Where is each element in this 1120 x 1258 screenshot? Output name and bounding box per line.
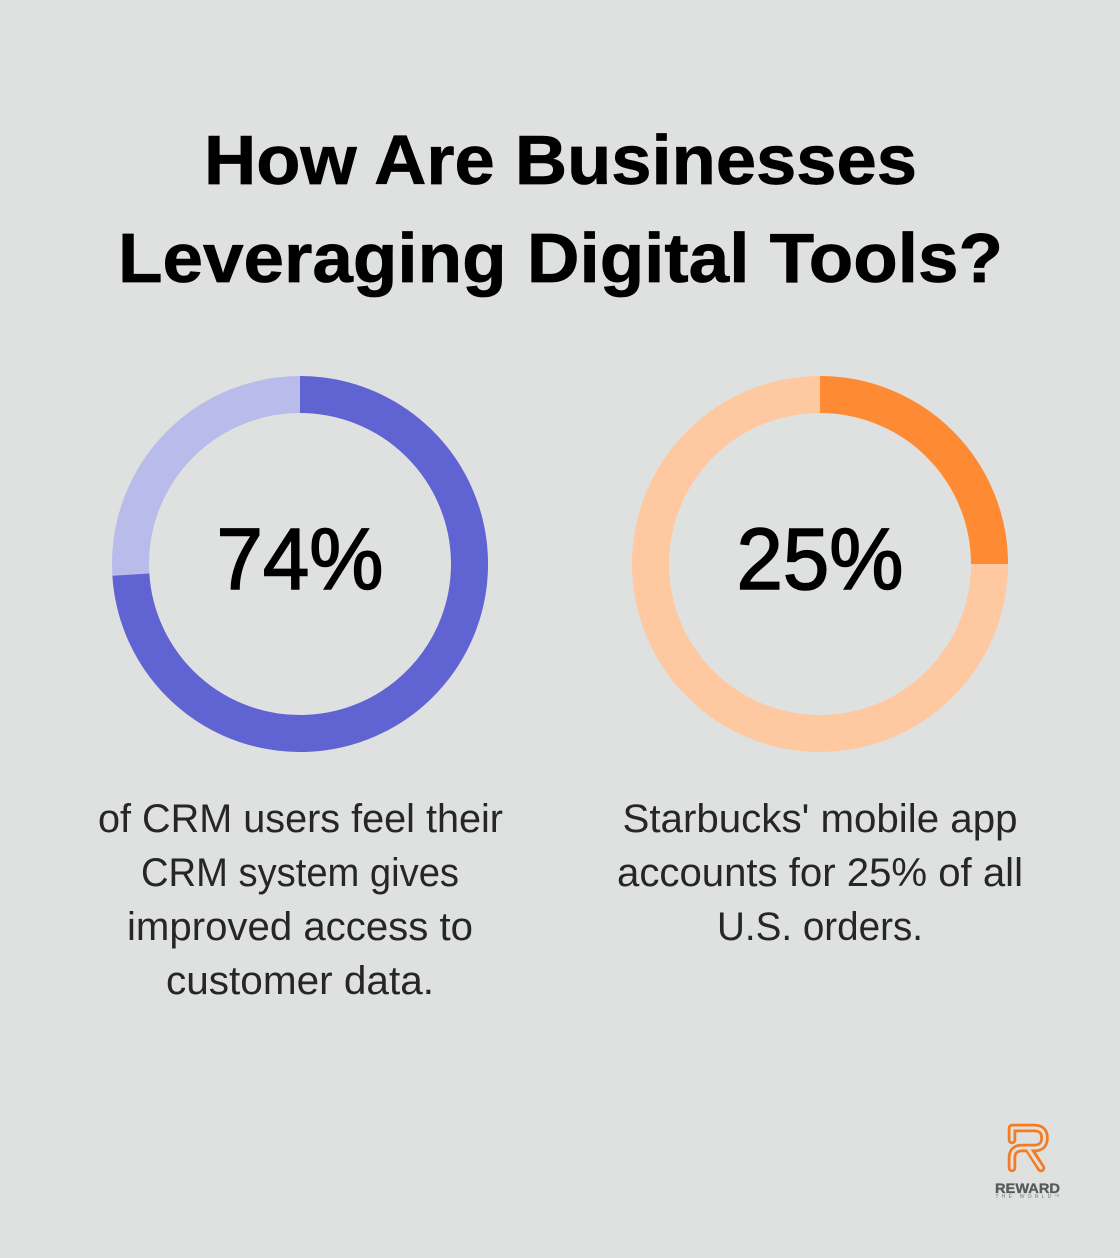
description: Starbucks app: Starbucks' mobile app <box>622 797 1018 841</box>
description: CRM users: of CRM users feel their <box>98 797 503 841</box>
title: How Are Businesses <box>204 121 917 199</box>
description: CRM users: improved access to <box>127 905 473 949</box>
icon: R mark <box>1012 1128 1044 1168</box>
stat value: 74%: 74% <box>216 511 384 608</box>
title <box>118 121 1003 297</box>
stat value: 25%: 25% <box>736 511 904 608</box>
logo: Reward the World <box>995 1128 1060 1200</box>
tagline: THE WORLD™ <box>996 1194 1060 1200</box>
title: Leveraging Digital Tools? <box>118 219 1003 297</box>
description: Starbucks app: accounts for 25% of all <box>617 851 1023 895</box>
donut chart: 74% <box>130 394 470 734</box>
description: Starbucks app: U.S. orders. <box>717 905 923 949</box>
donut chart: 25% <box>650 394 990 734</box>
panel: 74% CRM stat <box>98 394 503 1003</box>
description: CRM users: customer data. <box>166 959 434 1003</box>
description: Starbucks app <box>617 797 1023 949</box>
panel: 25% Starbucks stat <box>617 394 1023 949</box>
wordmark: REWARD <box>995 1180 1060 1196</box>
description: CRM users <box>98 797 503 1003</box>
description: CRM users: CRM system gives <box>141 851 459 895</box>
